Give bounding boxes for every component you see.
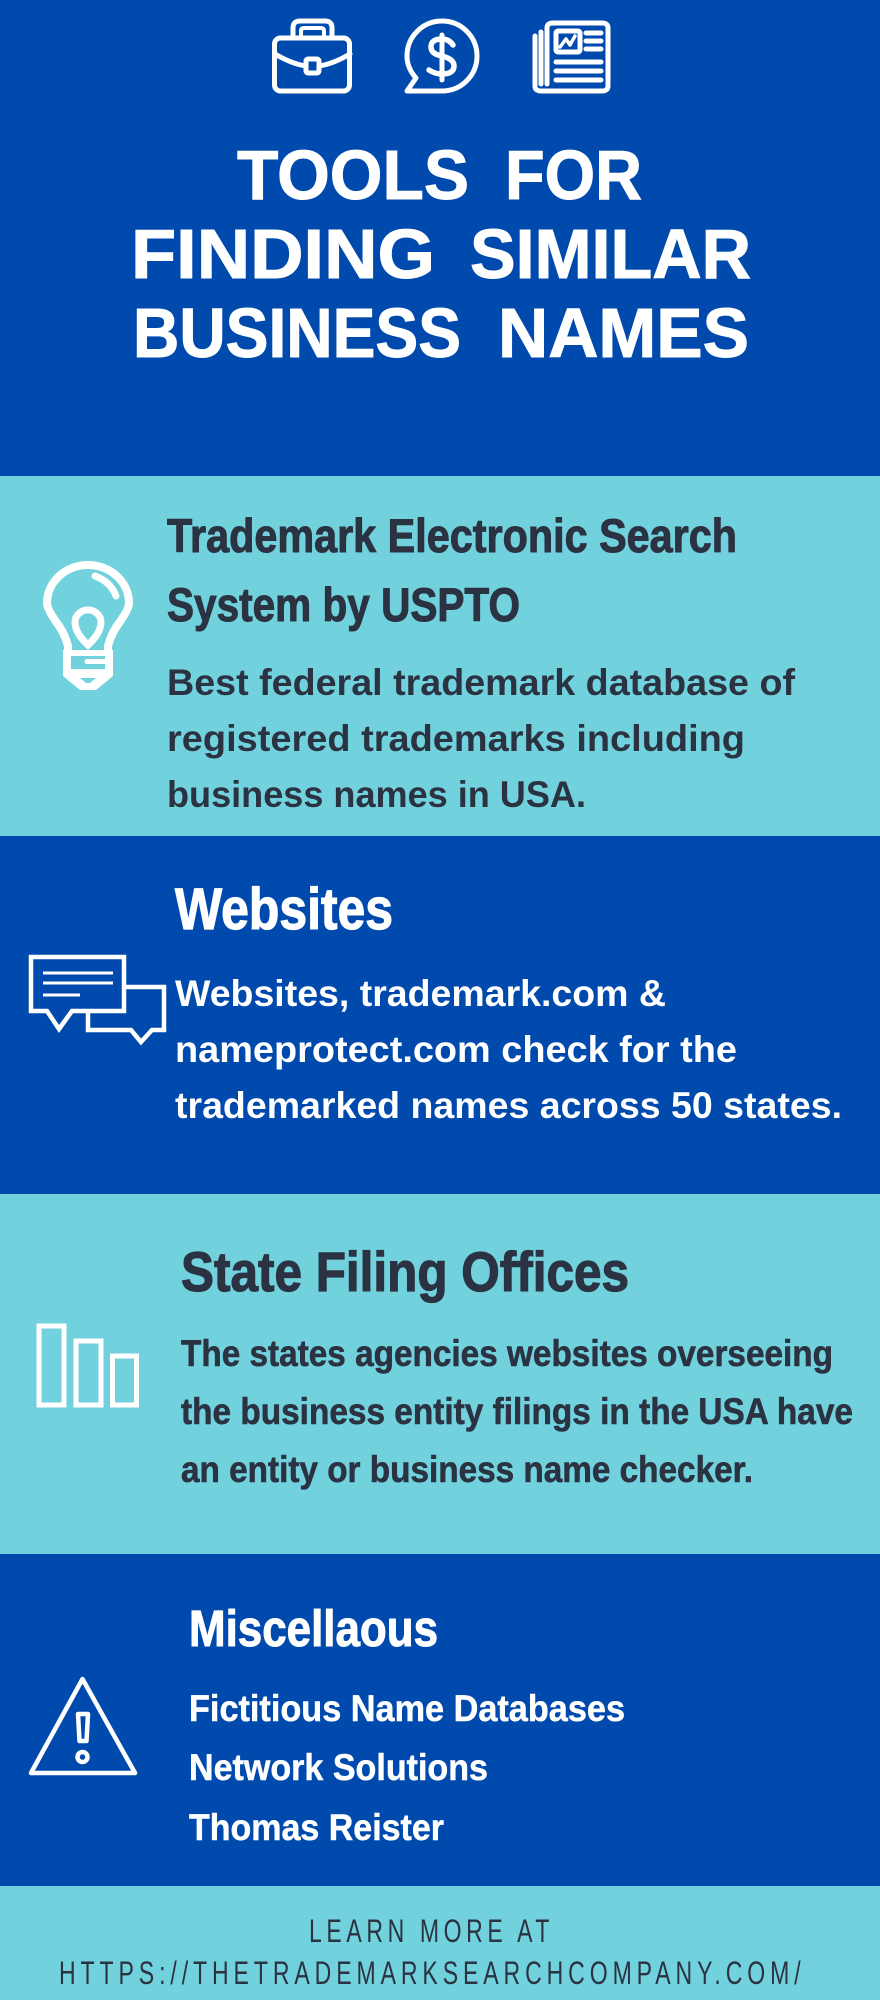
text: trademark database description: business names in USA. — [167, 774, 586, 815]
heading: trademark electronic search system: Trademark Electronic Search — [167, 509, 737, 562]
panel: footer background — [0, 1886, 880, 2000]
footer: learn more link: LEARN MORE AT — [309, 1913, 549, 1949]
title: FOR — [505, 136, 642, 214]
icon: chat bubbles — [31, 957, 164, 1042]
text: miscellaneous list: Fictitious Name Databases — [189, 1688, 625, 1729]
text: miscellaneous list — [189, 1688, 625, 1848]
text: trademark database description — [167, 662, 796, 815]
panel: trademark search background — [0, 476, 880, 836]
text: trademark database description: registered trademarks including — [167, 718, 745, 759]
icon: briefcase — [274, 21, 350, 91]
text: state filing description — [181, 1333, 853, 1490]
footer: learn more link — [59, 1913, 801, 1991]
text: miscellaneous list: Network Solutions — [189, 1747, 488, 1788]
icon: light bulb — [47, 565, 129, 690]
title — [131, 136, 751, 372]
title: TOOLS — [237, 136, 469, 214]
text: websites description — [175, 973, 842, 1126]
title: FINDING — [131, 215, 435, 293]
title: SIMILAR — [470, 215, 751, 293]
icon: dollar speech bubble — [407, 21, 477, 91]
text: websites description: trademarked names across 50 states. — [175, 1085, 842, 1126]
icon: warning triangle — [31, 1679, 135, 1773]
icon: newspaper — [535, 23, 608, 91]
panel: state filing offices background — [0, 1194, 880, 1554]
heading: state filing offices: State Filing Offices — [181, 1240, 629, 1303]
panel: miscellaneous background — [0, 1554, 880, 1886]
heading: websites: Websites — [175, 877, 393, 942]
title: BUSINESS — [133, 294, 461, 372]
title: NAMES — [498, 294, 749, 372]
text: websites description: nameprotect.com check for the — [175, 1029, 737, 1070]
text: websites description: Websites, trademark.com & — [175, 973, 666, 1014]
heading: trademark electronic search system: System by USPTO — [167, 578, 520, 631]
heading: trademark electronic search system — [167, 509, 737, 631]
footer: learn more link: HTTPS://THETRADEMARKSEARCHCOMPANY.COM/ — [59, 1955, 801, 1991]
panel: websites background — [0, 836, 880, 1194]
text: trademark database description: Best federal trademark database of — [167, 662, 796, 703]
icon: bar columns — [39, 1326, 136, 1405]
panel: header background — [0, 0, 880, 476]
text: miscellaneous list: Thomas Reister — [189, 1807, 444, 1848]
text: state filing description: an entity or business name checker. — [181, 1449, 753, 1490]
heading: miscellaous: Miscellaous — [189, 1600, 438, 1657]
